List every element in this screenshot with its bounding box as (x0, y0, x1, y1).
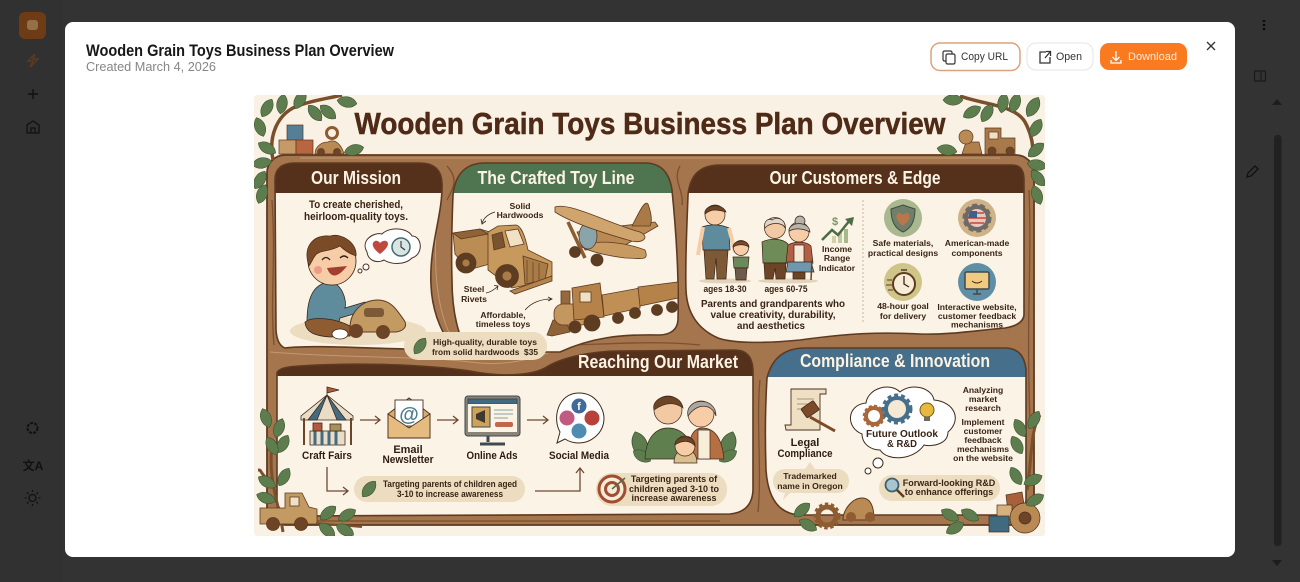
illustration: wooden biplane (555, 203, 658, 266)
wooden frame (267, 155, 1034, 525)
thought dots (865, 458, 883, 474)
scroll down arrow (1272, 560, 1282, 566)
icon: online ads monitor (465, 396, 520, 444)
button: copy URL (931, 43, 1020, 70)
callout: target audience pill: children aged 3-10 to (629, 484, 720, 494)
label: future outlook: & R&D (887, 438, 917, 450)
research text: feedback (964, 435, 1002, 445)
callout: steel rivets: Steel (464, 284, 484, 294)
edge label: American-made: components (951, 248, 1003, 258)
button: download: Download (1128, 51, 1177, 63)
decoration: gear and wooden car (815, 498, 875, 528)
panel: our mission (274, 162, 444, 350)
heading: our mission: Our Mission (311, 168, 401, 188)
button: close (1207, 42, 1215, 50)
edge label: safe materials: Safe materials, (873, 238, 933, 248)
edge label: delivery goal: for delivery (880, 311, 926, 321)
callout: high-quality toys pill: from solid hardwoods $35 (432, 347, 538, 357)
icon: craft fair tent (301, 387, 353, 445)
icon: more menu (1263, 20, 1265, 30)
research text (953, 385, 1013, 463)
callout: trademarked name (773, 462, 849, 500)
illustration: boy playing with wooden car (290, 235, 426, 345)
heading: reaching our market: Reaching Our Market (578, 352, 738, 372)
callout: solid hardwoods: Solid (509, 201, 531, 211)
callout: steel rivets (462, 285, 498, 302)
decoration: wooden blocks and wheel (989, 492, 1040, 533)
vine: bottom right leaves (791, 500, 981, 538)
label: craft fairs: Craft Fairs (302, 450, 352, 462)
icon: theme (24, 490, 40, 506)
income range label (819, 246, 855, 271)
icon: legal scroll and gavel (785, 389, 835, 431)
label: legal compliance: Legal (791, 437, 819, 449)
panel: our customers and edge (680, 160, 1030, 350)
modal date: Created March 4, 2026 (86, 59, 216, 74)
button: download (1100, 43, 1187, 70)
edge label: safe materials: practical designs (868, 248, 938, 258)
research text: Analyzing (963, 385, 1003, 395)
poster title: Wooden Grain Toys Business Plan Overview (354, 106, 946, 141)
heading: customers and edge: Our Customers & Edge (770, 168, 940, 188)
panel: the crafted toy line (445, 160, 685, 355)
edge label: delivery goal (877, 303, 928, 320)
illustration: wooden truck (453, 225, 552, 294)
right controls (1247, 20, 1282, 566)
label: email newsletter: Email (393, 444, 423, 456)
icon: bolt (28, 54, 38, 67)
callout: trademarked name: Trademarked (783, 471, 837, 481)
panel: reaching our market (270, 345, 760, 520)
illustration: wooden train (547, 282, 678, 336)
callout: affordable timeless toys: timeless toys (476, 319, 530, 329)
income range label: Income (822, 244, 852, 254)
left sidebar (0, 0, 62, 582)
callout: trademarked name: name in Oregon (777, 481, 843, 491)
icon: income chart (822, 216, 854, 243)
research text: on the website (953, 453, 1013, 463)
illustration: grandparents (758, 216, 818, 284)
research text: customer (964, 426, 1003, 436)
panel: compliance and innovation (760, 345, 1040, 533)
button: open: Open (1056, 51, 1082, 63)
edge label: interactive website: customer feedback (938, 311, 1016, 321)
button: open (1027, 43, 1093, 70)
illustration: future outlook cloud (850, 387, 955, 458)
icon: income chart: $ (832, 216, 838, 228)
callout: forward-looking R&D: Forward-looking R&D (903, 478, 996, 488)
customer description: and aesthetics (737, 320, 805, 332)
callout: targeting pill: 3-10 to increase awareness (397, 489, 503, 499)
edge label: American-made: American-made (945, 238, 1009, 248)
callout: solid hardwoods (481, 201, 544, 224)
icon: plus (28, 89, 38, 99)
research text: Implement (962, 417, 1005, 427)
income range label: Range (824, 253, 850, 263)
callout: forward-looking R&D (879, 475, 1000, 501)
callout: forward-looking R&D: to enhance offerings (905, 487, 993, 497)
icon: email envelope: @ (399, 404, 419, 426)
icon: shield (884, 199, 922, 237)
edge label: interactive website: mechanisms (951, 320, 1003, 330)
callout: solid hardwoods: Hardwoods (497, 210, 544, 220)
illustration: family group (628, 396, 740, 466)
label: online ads: Online Ads (466, 450, 518, 462)
customer description (702, 300, 845, 329)
callout: target audience pill (596, 473, 727, 506)
label: legal compliance (778, 437, 832, 460)
mission statement: heirloom-quality toys. (304, 211, 408, 223)
callout: high-quality toys pill: High-quality, durable toys (433, 337, 537, 347)
callout: targeting pill: Targeting parents of children aged (383, 479, 517, 489)
age label: ages 60-75: ages 60-75 (764, 284, 808, 294)
flow connector: fairs to targeting (327, 467, 348, 495)
label: future outlook (866, 428, 938, 450)
icon: home (27, 121, 39, 133)
research text: mechanisms (957, 444, 1009, 454)
modal title: Wooden Grain Toys Business Plan Overview (86, 42, 394, 60)
research text: research (965, 403, 1001, 413)
toy: wooden truck bottom left (260, 493, 317, 530)
customer description: value creativity, durability, (710, 309, 836, 321)
label: legal compliance: Compliance (778, 448, 832, 460)
income range label: Indicator (819, 263, 856, 273)
arrow: email to online ads (437, 416, 458, 424)
edge label: American-made (945, 240, 1009, 258)
button: copy URL: Copy URL (961, 51, 1008, 63)
age label: ages 18-30: ages 18-30 (704, 284, 746, 294)
icon: side panel (1254, 71, 1266, 81)
heading: compliance and innovation: Compliance & Innovation (800, 351, 990, 371)
icon: email envelope (388, 398, 430, 438)
icon: pencil (1247, 166, 1258, 177)
tree branch: top left (250, 89, 358, 205)
callout: high-quality toys pill (404, 332, 547, 360)
callout: targeting pill (354, 476, 525, 502)
illustration: father and child (698, 205, 751, 284)
toys: blocks and car (279, 125, 365, 158)
customer description: Parents and grandparents who (701, 298, 845, 310)
icon: smiling monitor (958, 263, 996, 301)
icon: settings (28, 423, 38, 433)
icon: stopwatch (884, 263, 922, 301)
icon: thought bubble with heart and clock (358, 229, 420, 273)
research text: market (969, 394, 997, 404)
icon: social media bubble: f (577, 401, 581, 413)
icon: logo (19, 12, 46, 39)
icon: American gear (958, 199, 996, 237)
mission statement: To create cherished, (309, 199, 403, 211)
callout: affordable timeless toys (476, 297, 552, 329)
arrow: craft fairs to email (360, 416, 380, 424)
arrow: online ads to social media (527, 416, 548, 424)
callout: affordable timeless toys: Affordable, (480, 310, 526, 320)
tree branch: top right (943, 92, 1048, 206)
label: future outlook: Future Outlook (866, 428, 938, 440)
scrollbar track (1274, 135, 1282, 546)
mission statement (304, 199, 408, 223)
edge label: delivery goal: 48-hour goal (877, 301, 929, 311)
infographic poster (250, 89, 1048, 540)
vine: bottom left branch (316, 503, 362, 540)
edge label: interactive website: Interactive website, (937, 302, 1017, 312)
toys: teddy and train (936, 128, 1015, 157)
callout: target audience pill: increase awareness (631, 493, 717, 503)
label: email newsletter (383, 445, 434, 463)
callout: steel rivets: Rivets (461, 294, 487, 304)
heading: crafted toy line: The Crafted Toy Line (478, 168, 634, 188)
scroll up arrow (1272, 99, 1282, 105)
edge label: interactive website (938, 304, 1016, 328)
callout: target audience pill: Targeting parents of (631, 474, 718, 484)
icon: translate: 文A (23, 458, 44, 473)
vine: lower right (1006, 409, 1046, 510)
label: social media: Social Media (549, 450, 610, 462)
edge label: safe materials (868, 240, 938, 258)
vine: lower left (255, 407, 294, 532)
flow connector: targeting to social media (535, 468, 584, 491)
label: email newsletter: Newsletter (382, 454, 434, 466)
icon: social media bubble (557, 393, 604, 443)
